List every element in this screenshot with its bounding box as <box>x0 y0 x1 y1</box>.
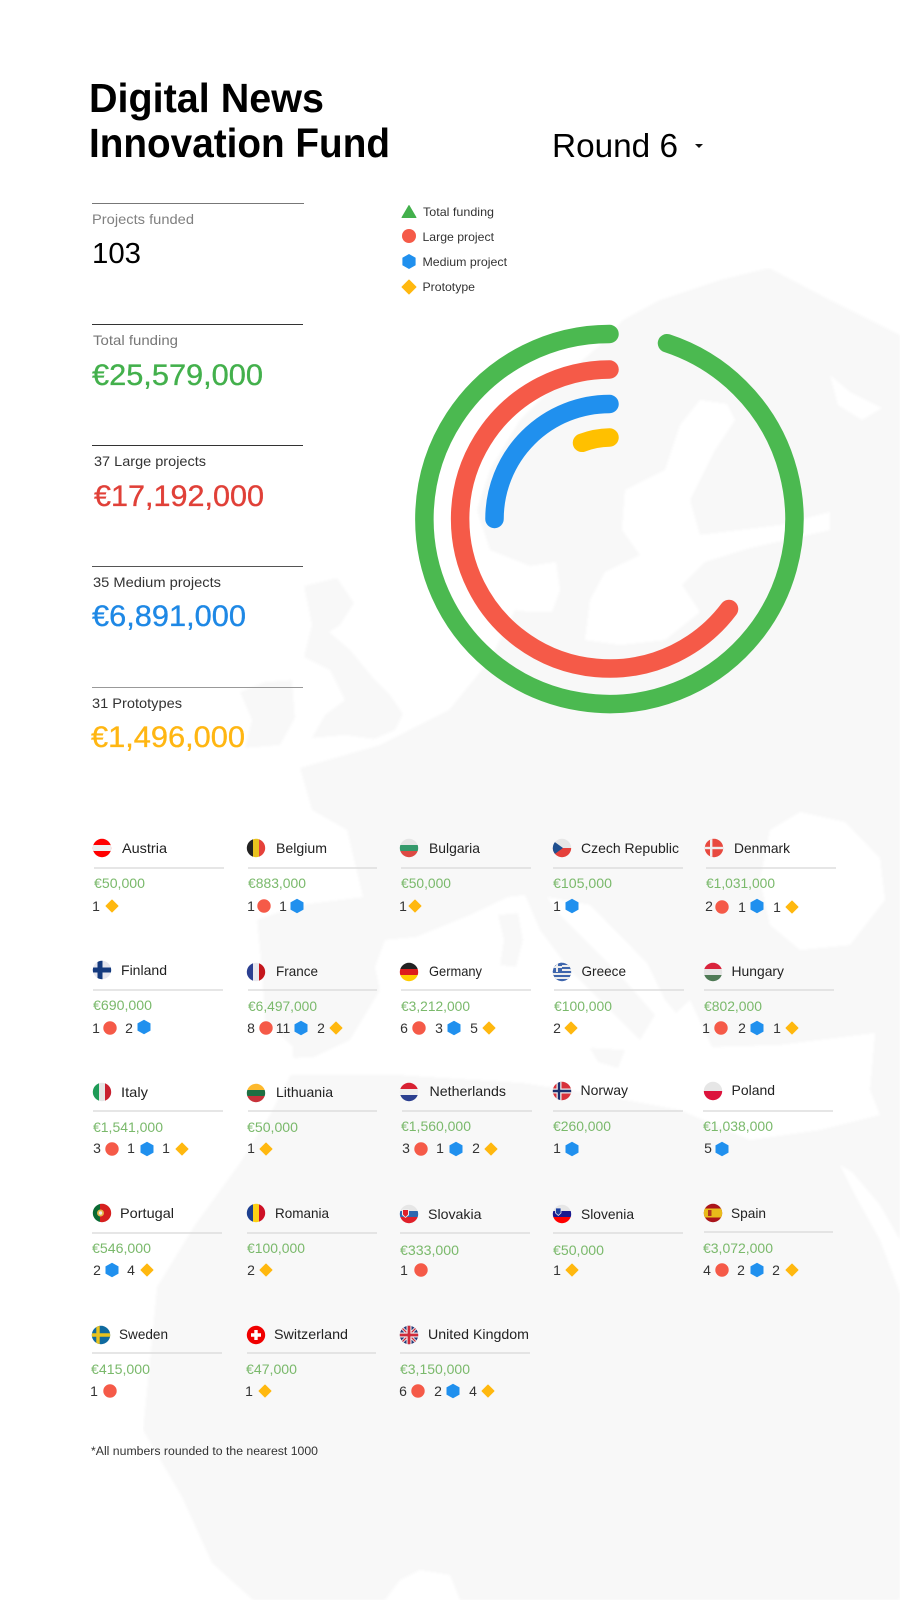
card: Denmark <box>704 838 836 915</box>
card: Germany: €3,212,000 <box>401 998 470 1014</box>
card: Austria <box>92 838 224 914</box>
card: Romania <box>246 1203 377 1278</box>
card: Spain: 4 <box>703 1262 711 1278</box>
card: Slovakia <box>399 1204 530 1278</box>
card: Netherlands: 2 <box>472 1140 480 1156</box>
card: Portugal: 2 <box>93 1262 101 1278</box>
card: Finland <box>92 960 223 1036</box>
card: Austria: 1 <box>92 898 100 914</box>
card: Poland: 5 <box>704 1140 712 1156</box>
card: Slovakia: 1 <box>400 1262 408 1278</box>
card: Greece: Greece <box>582 963 626 979</box>
flag: Switzerland <box>246 1325 266 1345</box>
card: Lithuania: €50,000 <box>247 1119 298 1135</box>
footnote: *All numbers rounded to the nearest 1000 <box>91 1446 318 1458</box>
legend: large project: Large project <box>422 230 495 244</box>
card: Slovakia: €333,000 <box>400 1242 459 1258</box>
card: Belgium: Belgium <box>276 840 327 856</box>
card: Portugal: €546,000 <box>92 1240 151 1256</box>
stat: large projects: 37 Large projects <box>94 453 206 469</box>
stat: total funding <box>92 324 303 392</box>
card: Czech Republic <box>552 838 683 914</box>
arc: large projects <box>460 370 729 668</box>
card: Romania: Romania <box>275 1205 329 1221</box>
card: Finland: 1 <box>92 1020 100 1036</box>
title <box>89 75 390 166</box>
stat: medium projects: 35 Medium projects <box>93 574 221 590</box>
card: Denmark: €1,031,000 <box>706 875 775 891</box>
title: Digital News <box>89 75 324 121</box>
card: United Kingdom <box>399 1325 530 1399</box>
card: Italy <box>92 1082 223 1156</box>
card: Czech Republic: Czech Republic <box>581 840 679 856</box>
card: Sweden: €415,000 <box>91 1361 150 1377</box>
stat: large projects: €17,192,000 <box>94 480 264 513</box>
card: Switzerland: Switzerland <box>274 1326 348 1342</box>
card: France <box>246 962 377 1036</box>
card: Slovenia <box>552 1204 683 1278</box>
card: Germany <box>399 962 531 1036</box>
card: Denmark: 1 <box>738 899 746 915</box>
card: Switzerland: €47,000 <box>246 1361 297 1377</box>
card: Norway <box>552 1081 683 1156</box>
arc: total funding <box>424 334 794 704</box>
card: Germany: 5 <box>470 1020 478 1036</box>
card: Slovenia: €50,000 <box>553 1242 604 1258</box>
card: Netherlands: 3 <box>402 1140 410 1156</box>
card: Norway: Norway <box>580 1082 628 1098</box>
card: Hungary <box>702 962 834 1036</box>
card: Netherlands: 1 <box>436 1140 444 1156</box>
card: Romania: €100,000 <box>247 1240 305 1256</box>
stat: prototypes <box>91 688 303 754</box>
card: Spain: €3,072,000 <box>703 1240 773 1256</box>
card: Norway: €260,000 <box>553 1118 611 1134</box>
stat: prototypes: 31 Prototypes <box>92 695 182 711</box>
stat: prototypes: €1,496,000 <box>91 721 245 754</box>
card: Finland: Finland <box>121 962 167 978</box>
flag: Norway <box>552 1081 572 1101</box>
card: Switzerland: 1 <box>245 1383 253 1399</box>
arc: medium projects <box>494 404 610 519</box>
card: Spain: 2 <box>737 1262 745 1278</box>
card: Denmark: Denmark <box>734 840 791 856</box>
card: United Kingdom: €3,150,000 <box>400 1361 470 1377</box>
card: Slovenia: 1 <box>553 1262 561 1278</box>
card: Slovenia: Slovenia <box>581 1206 634 1222</box>
stat: medium projects: €6,891,000 <box>92 600 246 633</box>
card: Belgium: 1 <box>279 898 287 914</box>
card: Belgium: €883,000 <box>248 875 306 891</box>
flag: Slovakia <box>399 1204 419 1224</box>
card: Germany: 6 <box>400 1020 408 1036</box>
legend: prototype: Prototype <box>422 280 475 294</box>
flag: Bulgaria <box>399 838 419 858</box>
card: United Kingdom: 6 <box>399 1383 407 1399</box>
panel: summary stats <box>91 204 304 754</box>
card: Hungary: 1 <box>773 1020 781 1036</box>
card: Greece <box>552 962 684 1036</box>
round selector: Round 6 <box>552 127 678 164</box>
card: Belgium: 1 <box>247 898 255 914</box>
card: Poland: €1,038,000 <box>703 1118 773 1134</box>
card: Finland: 2 <box>125 1020 133 1036</box>
flag: Italy <box>92 1082 112 1102</box>
card: Italy: 3 <box>93 1140 101 1156</box>
flag: Austria <box>92 838 112 858</box>
card: France: France <box>276 963 318 979</box>
flag: Portugal <box>92 1203 112 1223</box>
flag: Denmark <box>704 838 724 858</box>
card: Lithuania: Lithuania <box>276 1084 333 1100</box>
card: France: 11 <box>276 1020 290 1036</box>
legend <box>402 205 508 294</box>
card: Czech Republic: 1 <box>553 898 561 914</box>
card: Denmark: 2 <box>705 898 713 914</box>
card: United Kingdom: 2 <box>434 1383 442 1399</box>
card: Germany: 3 <box>435 1020 443 1036</box>
card: Austria: Austria <box>122 840 167 856</box>
card: Czech Republic: €105,000 <box>553 875 612 891</box>
card: Germany: Germany <box>429 963 482 979</box>
flag: Belgium <box>246 838 266 858</box>
card: Bulgaria: 1 <box>399 898 407 914</box>
card: Portugal: 4 <box>127 1262 135 1278</box>
card: Greece: 2 <box>553 1020 561 1036</box>
flag: Poland <box>703 1081 723 1101</box>
card: Hungary: €802,000 <box>704 998 762 1014</box>
stat: total funding: Total funding <box>93 332 178 348</box>
card: United Kingdom: 4 <box>469 1383 477 1399</box>
flag: Finland <box>92 960 112 980</box>
card: Spain: 2 <box>772 1262 780 1278</box>
card: Poland: Poland <box>732 1082 775 1098</box>
card: Netherlands: €1,560,000 <box>401 1118 471 1134</box>
card: Italy: 1 <box>162 1140 170 1156</box>
card: Romania: 2 <box>247 1262 255 1278</box>
flag: Netherlands <box>400 1082 418 1102</box>
background map of Europe <box>143 268 900 1600</box>
radial chart <box>424 334 794 704</box>
card: Spain <box>703 1203 833 1278</box>
card: Lithuania <box>246 1083 377 1156</box>
flag: Slovenia <box>552 1204 572 1224</box>
card: France: €6,497,000 <box>248 998 317 1014</box>
flag: France <box>246 962 266 982</box>
stat: projects funded <box>92 204 304 270</box>
card: Hungary: 2 <box>738 1020 746 1036</box>
card: Netherlands: Netherlands <box>430 1083 506 1099</box>
card: Switzerland <box>245 1325 376 1399</box>
card: France: 8 <box>247 1020 255 1036</box>
title: Innovation Fund <box>89 120 390 166</box>
legend: medium project: Medium project <box>422 255 508 269</box>
country grid <box>90 838 836 1399</box>
card: Italy: 1 <box>127 1140 135 1156</box>
card: Sweden <box>90 1325 222 1399</box>
flag: Sweden <box>91 1325 111 1345</box>
card: Bulgaria: €50,000 <box>401 875 451 891</box>
flag: Hungary <box>704 962 722 982</box>
card: Hungary: 1 <box>702 1020 710 1036</box>
card: Portugal: Portugal <box>120 1205 174 1221</box>
card: Austria: €50,000 <box>94 875 145 891</box>
card: Italy: €1,541,000 <box>93 1119 163 1135</box>
card: Portugal <box>92 1203 222 1278</box>
flag: Spain <box>703 1203 723 1223</box>
stat: large projects <box>92 446 303 513</box>
card: Greece: €100,000 <box>554 998 612 1014</box>
card: Denmark: 1 <box>773 899 781 915</box>
card: Norway: 1 <box>553 1140 561 1156</box>
card: Bulgaria <box>399 838 531 914</box>
card: Belgium <box>246 838 377 914</box>
card: Lithuania: 1 <box>247 1140 255 1156</box>
flag: United Kingdom <box>399 1325 419 1345</box>
card: Italy: Italy <box>121 1084 148 1100</box>
card: France: 2 <box>317 1020 325 1036</box>
stat: total funding: €25,579,000 <box>92 359 263 392</box>
arc: prototypes <box>582 438 610 443</box>
legend: total funding: Total funding <box>423 205 494 219</box>
card: Netherlands <box>399 1082 532 1156</box>
stat: medium projects <box>92 566 303 633</box>
card: Sweden: 1 <box>90 1383 98 1399</box>
stat: projects funded: 103 <box>92 238 141 270</box>
flag: Czech Republic <box>552 838 572 858</box>
stat: projects funded: Projects funded <box>92 211 194 227</box>
flag: Greece <box>552 962 572 982</box>
card: Sweden: Sweden <box>119 1326 168 1342</box>
card: Bulgaria: Bulgaria <box>429 840 480 856</box>
flag: Lithuania <box>246 1083 266 1103</box>
card: Poland <box>703 1081 833 1156</box>
flag: Germany <box>399 962 419 982</box>
flag: Romania <box>246 1203 266 1223</box>
card: Slovakia: Slovakia <box>428 1206 482 1222</box>
card: Hungary: Hungary <box>732 963 784 979</box>
card: Spain: Spain <box>731 1205 766 1221</box>
card: Finland: €690,000 <box>93 997 152 1013</box>
card: United Kingdom: United Kingdom <box>428 1326 529 1342</box>
